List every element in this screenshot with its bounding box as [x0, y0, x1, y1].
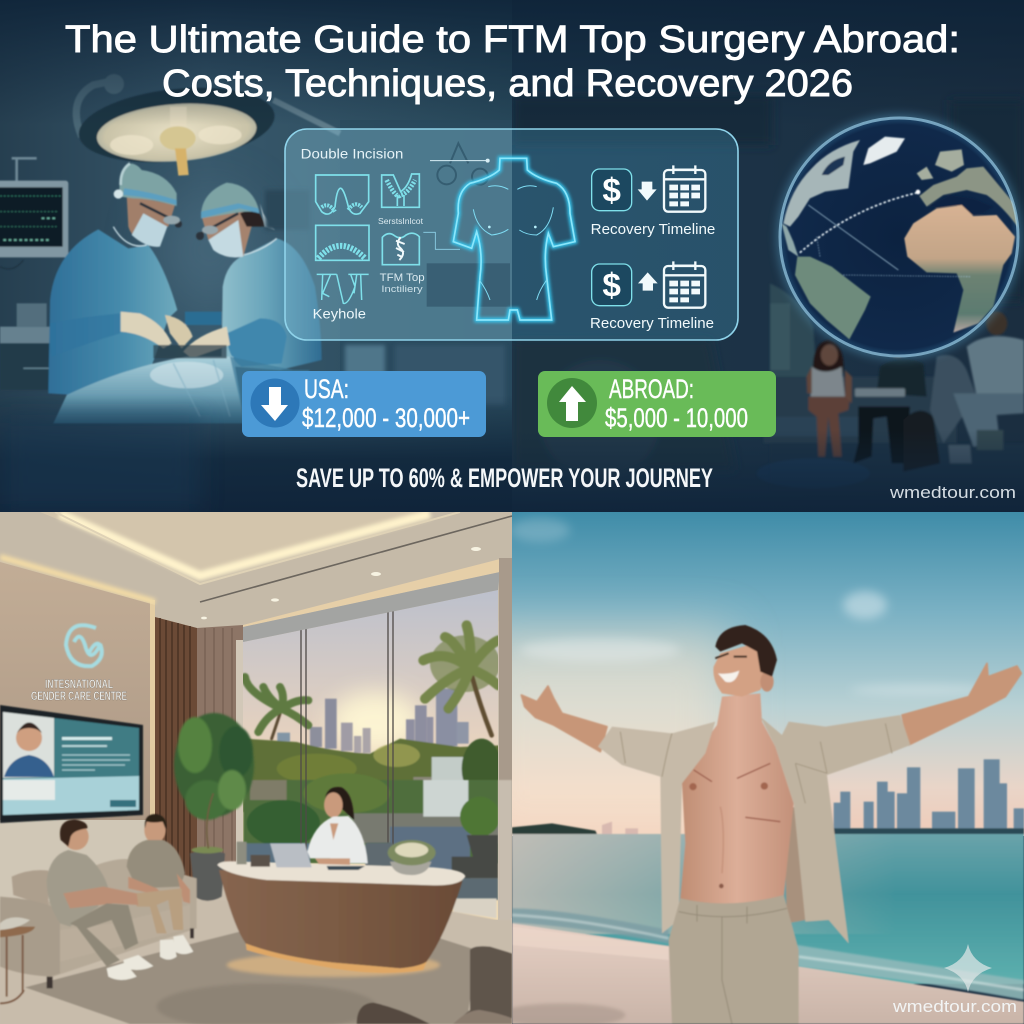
- foliage and pool: [243, 773, 500, 903]
- back wall: [0, 562, 155, 820]
- icon: arrow up: [638, 272, 658, 291]
- hudson bay: [822, 157, 845, 175]
- scars: [694, 763, 780, 822]
- chest details: [689, 782, 768, 888]
- icon: periareolar technique: [382, 174, 419, 207]
- icon: sparkle: [944, 944, 992, 992]
- icon: double incision technique: [316, 175, 369, 214]
- ceiling: [0, 512, 512, 620]
- icon: calendar top: [664, 165, 705, 212]
- photo: patient lounge: [512, 40, 1024, 488]
- potted plant foliage: [174, 713, 254, 820]
- land: South America: [795, 257, 871, 339]
- label second line: Inctiliery: [381, 284, 423, 294]
- icon: up arrow: [547, 378, 597, 428]
- wall lettering: INTESNATIONAL: [45, 677, 113, 691]
- palm trees: [245, 625, 500, 739]
- panel: clinic reception photo: [0, 512, 512, 1024]
- photo: operating room with surgeons: [0, 1, 512, 455]
- panel: procedure diagram glass card: [285, 129, 738, 340]
- floor, rug and desk glow: [0, 780, 512, 1024]
- panel: surgery and clinic background: [0, 0, 1024, 512]
- label: Recovery Timeline top: Recovery Timeline: [591, 221, 715, 238]
- icon: keyhole technique: [317, 274, 369, 303]
- icon: helix technique: [382, 233, 419, 265]
- sky: [512, 512, 1024, 836]
- sofa: [0, 859, 197, 988]
- figure: draped patient: [53, 345, 310, 423]
- callout: USA cost: [242, 371, 486, 437]
- icon: inverted T technique: [316, 225, 369, 260]
- figure: man with arms raised: [521, 625, 1021, 1024]
- watermark top: wmedtour.com: [889, 483, 1016, 502]
- figure: left surgeon: [48, 163, 193, 397]
- open linen shirt left: [598, 722, 715, 933]
- leader line: [423, 232, 460, 249]
- torso: [680, 693, 794, 904]
- title: The Ultimate Guide to FTM Top Surgery Abroad:: [65, 19, 960, 61]
- land: Scandinavia and Britain: [917, 149, 964, 180]
- icon: clinic logo: [66, 625, 102, 666]
- dark footprints: [499, 1003, 625, 1024]
- land: Europe and Asia: [919, 167, 1020, 230]
- equipment cabinet: [0, 303, 222, 390]
- land: Central America: [782, 223, 798, 257]
- icon: dollar badge, cost down: [592, 169, 632, 211]
- scaled diagram contents: [301, 143, 715, 332]
- left arm: [521, 686, 607, 752]
- land: North America: [783, 140, 860, 227]
- tv screen: [0, 705, 143, 823]
- icon: vital signs monitor: [0, 158, 68, 269]
- wood slat wall and curtain: [150, 600, 244, 880]
- wall lettering: GENDER CARE CENTRE: [31, 689, 127, 703]
- cost text: abroad: $5,000 - 10,000: [605, 403, 748, 433]
- figure: seated man right: [127, 814, 193, 960]
- panel: beach recovery photo: [470, 512, 1024, 1024]
- figure: receptionist: [307, 787, 393, 866]
- sea: [512, 834, 1024, 1000]
- label: Keyhole: Keyhole: [313, 306, 366, 322]
- plant and sofa: [762, 284, 956, 472]
- side table: [0, 917, 35, 1003]
- cost text: USA: $12,000 - 30,000+: [302, 403, 470, 433]
- pants details: [679, 905, 787, 1024]
- figure: right surgeon: [183, 183, 322, 370]
- stethoscope behind glass: [437, 143, 488, 185]
- figures: waiting patients: [762, 284, 1024, 472]
- icon: glowing torso: [453, 158, 575, 320]
- title: Costs, Techniques, and Recovery 2026: [162, 63, 853, 105]
- label: Double Incision: Double Incision: [301, 145, 403, 161]
- icon: dollar badge, cost down: $: [602, 173, 621, 210]
- figure: man in light shirt: [948, 311, 1024, 463]
- open linen shirt right: [760, 715, 910, 943]
- callout: abroad cost: [538, 371, 776, 437]
- shirt details: [620, 723, 892, 803]
- label: Serstsinlcot: SerstsInlcot: [378, 216, 424, 226]
- route lines: [798, 193, 917, 254]
- connector dot: [486, 159, 490, 163]
- hedge and garden: [243, 739, 502, 812]
- khaki pants: [669, 895, 799, 1024]
- figure: seated man left: [47, 819, 153, 980]
- globe illustration: [777, 115, 1021, 359]
- label: TFM Top Inctiliery: TFM Top: [380, 272, 425, 284]
- tagline: SAVE UP TO 60% & EMPOWER YOUR JOURNEY: [296, 463, 713, 493]
- land: Mediterranean gap: [929, 194, 982, 216]
- icon: arrow down: [638, 182, 657, 201]
- figure: seated woman right: [930, 355, 977, 443]
- window mullions: [301, 600, 393, 862]
- sand: [512, 923, 1024, 1024]
- head: [713, 625, 777, 697]
- potted plant: [190, 793, 225, 901]
- icon: dollar badge, cost up: [592, 264, 632, 306]
- wall lettering: [31, 679, 127, 700]
- reception desk: [217, 840, 465, 973]
- figure: man with backpack: [854, 357, 940, 471]
- right arm: [902, 663, 1021, 745]
- title: [65, 19, 960, 105]
- icon: dollar badge, cost up: $: [602, 268, 621, 305]
- watermark bottom: wmedtour.com: [892, 997, 1017, 1016]
- wet sand highlight: [512, 927, 669, 960]
- window view: [243, 590, 502, 920]
- dark screen inside panel: [427, 263, 510, 307]
- cost text: USA: [302, 374, 470, 433]
- cost text: abroad: ABROAD:: [609, 374, 694, 404]
- figure: woman on sofa: [807, 340, 852, 457]
- dark overlays: [0, 0, 1024, 125]
- city skyline: [512, 759, 1024, 834]
- label: Recovery Timeline bottom: Recovery Timeline: [590, 315, 714, 332]
- background equipment behind panel: [265, 190, 505, 405]
- warm haze on left sky: [470, 630, 730, 850]
- icon: calendar bottom: [664, 261, 705, 308]
- cost text: USA: USA:: [304, 374, 349, 404]
- connector line: [430, 159, 487, 162]
- inner shirt: [784, 805, 805, 923]
- land: Africa: [904, 205, 1015, 333]
- lamp and figures in reference scale: [0, 74, 340, 423]
- icon: down arrow: [250, 378, 300, 428]
- window header beams: [243, 559, 500, 642]
- icon: surgical lamp: [75, 74, 340, 176]
- foreground chair: [357, 946, 512, 1024]
- land: Greenland: [863, 137, 905, 165]
- city skyline: [277, 689, 469, 753]
- cost text: abroad: [605, 374, 748, 433]
